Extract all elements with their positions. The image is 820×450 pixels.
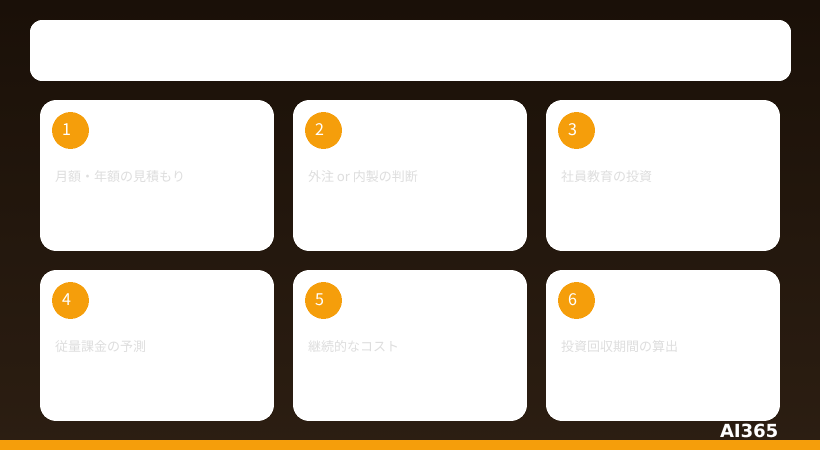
number badge 2: 2 bbox=[315, 116, 324, 140]
card 5 label: 継続的なコスト bbox=[308, 336, 399, 355]
number badge 3: 3 bbox=[568, 116, 577, 140]
number badge 6: 6 bbox=[568, 286, 577, 310]
number badge 6 bbox=[558, 282, 595, 319]
card 3 label: 社員教育の投資 bbox=[561, 166, 652, 185]
number badge 4: 4 bbox=[62, 286, 71, 310]
number badge 3 bbox=[558, 112, 595, 149]
card 4 label: 従量課金の予測 bbox=[55, 336, 146, 355]
panel: card 6 bbox=[546, 270, 780, 421]
number badge 5 bbox=[305, 282, 342, 319]
number badge 2 bbox=[305, 112, 342, 149]
panel: card 5 bbox=[293, 270, 527, 421]
card 1 label: 月額・年額の見積もり bbox=[55, 166, 185, 185]
bottom accent bar bbox=[0, 440, 820, 450]
card 2 label: 外注 or 内製の判断 bbox=[308, 166, 418, 185]
brand logo text: AI365 bbox=[720, 421, 778, 442]
panel: card 3 bbox=[546, 100, 780, 251]
number badge 1: 1 bbox=[62, 116, 71, 140]
card 6 label: 投資回収期間の算出 bbox=[561, 336, 678, 355]
number badge 1 bbox=[52, 112, 89, 149]
number badge 5: 5 bbox=[315, 286, 324, 310]
panel: card 1 bbox=[40, 100, 274, 251]
panel: card 2 bbox=[293, 100, 527, 251]
header panel bbox=[30, 20, 791, 81]
number badge 4 bbox=[52, 282, 89, 319]
panel: card 4 bbox=[40, 270, 274, 421]
